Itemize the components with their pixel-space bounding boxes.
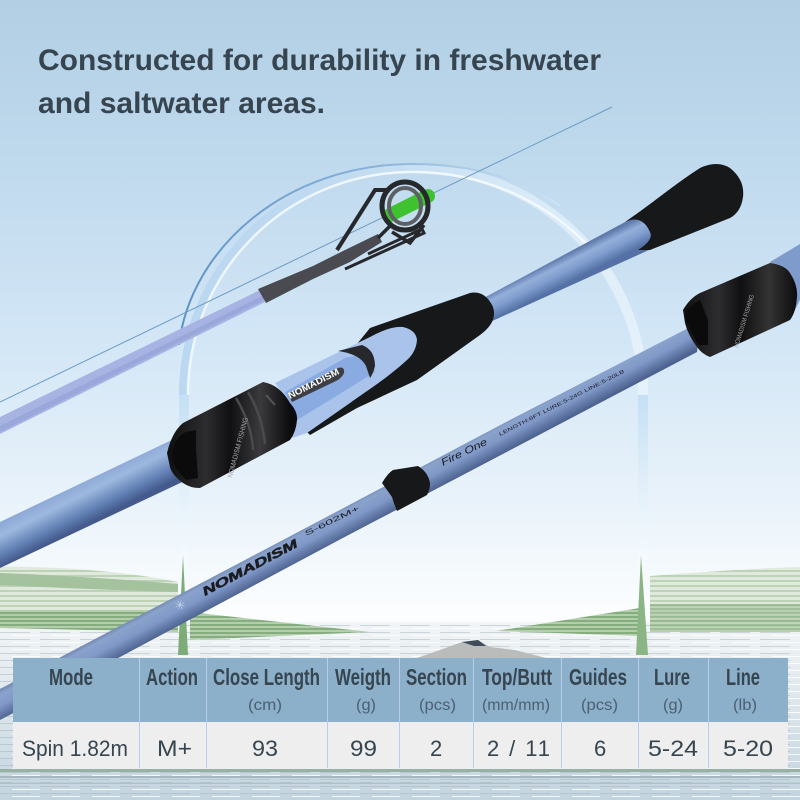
second rod blank [0, 322, 700, 720]
title [38, 44, 601, 120]
row values: 2 [430, 736, 442, 761]
header units: (cm) [248, 697, 282, 714]
row values: 5-20 [723, 736, 773, 761]
glass arch [179, 164, 643, 565]
blue seat [275, 327, 417, 438]
header units: (mm/mm) [482, 697, 550, 714]
header units: (pcs) [581, 697, 618, 714]
rock in lake [405, 640, 562, 662]
header units: (pcs) [419, 697, 456, 714]
row values: Spin 1.82m [22, 736, 128, 761]
main reel nut: NOMADISM FISHING [227, 417, 250, 479]
brand on rod: NOMADISM [200, 536, 301, 599]
header units: (g) [663, 697, 683, 714]
header labels: Close Length [213, 664, 320, 690]
header labels: Lure [654, 664, 690, 690]
table header [13, 658, 788, 722]
row values: 99 [350, 736, 377, 761]
rod markings [172, 368, 627, 614]
row values: 93 [252, 736, 278, 761]
header labels: Section [406, 664, 467, 690]
main reel nut [167, 382, 297, 488]
green tip indicator [390, 196, 428, 215]
reel seat and fore grip [275, 293, 494, 438]
header labels: Guides [569, 664, 627, 690]
header labels: Line [726, 664, 760, 690]
row values: 6 [594, 736, 606, 761]
header labels: Top/Butt [482, 664, 552, 690]
header labels [49, 664, 760, 690]
header units: (lb) [733, 697, 757, 714]
seat barrel [285, 352, 375, 420]
header units [248, 697, 757, 714]
title: Constructed for durability in freshwater [38, 44, 601, 77]
rod collar [382, 466, 430, 511]
star logo: ✳ [172, 596, 189, 614]
row values: M+ [157, 736, 192, 761]
fore grip [295, 293, 494, 435]
guide frame [337, 182, 428, 269]
brand label: NOMADISM [286, 366, 341, 401]
background hills and lake [0, 567, 800, 800]
butt grip [625, 164, 743, 250]
title: and saltwater areas. [38, 87, 325, 120]
rod tip section with guide [0, 182, 428, 434]
fishing line [0, 107, 612, 402]
main rod upper blank [480, 214, 660, 322]
script name: Fire One [439, 437, 490, 469]
row values: 2 / 11 [487, 736, 550, 761]
spec table [13, 658, 788, 769]
arch green legs [178, 555, 648, 655]
header labels: Action [146, 664, 198, 690]
second rod right section [770, 244, 800, 320]
header labels: Weigth [335, 664, 391, 690]
table row [13, 722, 788, 769]
main rod lower blank [0, 436, 195, 568]
guide wrap [258, 234, 382, 303]
column separators [140, 658, 708, 768]
header labels: Mode [49, 664, 93, 690]
second reel nut: NOMADISM FISHING [733, 294, 756, 349]
header units: (g) [356, 697, 376, 714]
spec text: LENGTH:6FT LURE:5-24G LINE:5-20LB [498, 368, 627, 438]
row values [22, 736, 773, 761]
seat window [338, 345, 375, 378]
row values: 5-24 [648, 736, 698, 761]
model code: S-602M+ [304, 505, 361, 538]
second reel nut [683, 263, 797, 357]
